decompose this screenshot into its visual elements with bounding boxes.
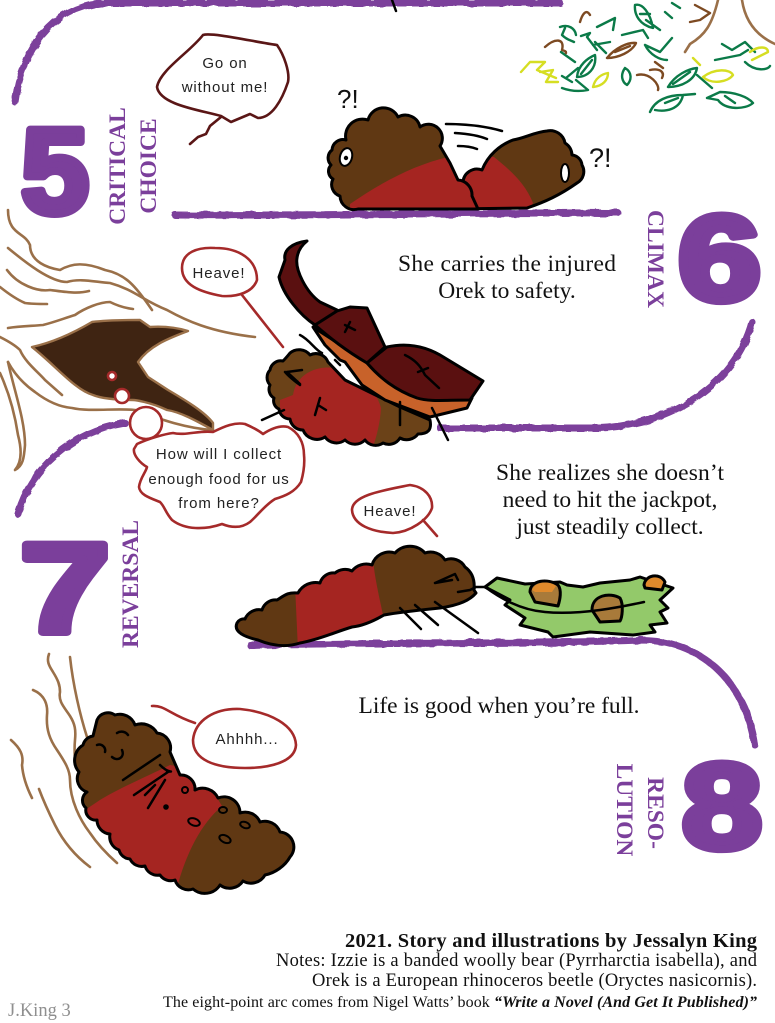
text: she realizes: She realizes she doesn’t	[496, 460, 724, 486]
purple path: ground and curve to resolution	[250, 640, 755, 745]
text: she carries	[398, 251, 616, 304]
label: resolution: LUTION	[611, 764, 637, 856]
number 8: 8	[682, 738, 762, 874]
text: she realizes: need to hit the jackpot,	[503, 487, 717, 513]
Izzie resting	[70, 713, 294, 895]
leaf pile and tree roots	[521, 0, 775, 112]
number 5: 5	[21, 103, 89, 239]
text: she carries: Orek to safety.	[438, 278, 576, 304]
speech bubble: heave (top): Heave!	[193, 265, 245, 282]
label: reversal: REVERSAL	[118, 520, 144, 648]
label: critical choice	[105, 107, 162, 225]
credits block: The eight-point arc comes from Nigel Watts’ book “Write a Novel (And Get It Published)”	[163, 994, 757, 1011]
text: she realizes	[496, 460, 724, 540]
label: critical choice: CRITICAL	[105, 107, 131, 225]
speech bubble: go on without me: Go on	[202, 55, 248, 72]
grass lines beside resting Izzie	[11, 654, 117, 867]
credits block	[163, 930, 758, 1011]
speech bubble: go on without me: without me!	[181, 79, 268, 96]
label: resolution: RESO-	[642, 777, 668, 849]
Izzie carrying Orek	[262, 350, 430, 450]
text: she carries: She carries the injured	[398, 251, 616, 277]
signature: J.King 3	[8, 1001, 71, 1021]
credits block: Notes: Izzie is a banded woolly bear (Pyrrharctia isabella), and	[276, 951, 758, 971]
question marks and motion lines	[337, 0, 612, 173]
speech bubble: ahhhh: Ahhhh...	[215, 731, 279, 748]
thought bubble: how will I collect: enough food for us	[148, 471, 290, 488]
text: life is good: Life is good when you’re full.	[358, 693, 640, 719]
number 6: 6	[678, 190, 761, 326]
question marks and motion lines: ?!	[337, 84, 359, 114]
Orek back half surprised	[462, 129, 586, 210]
speech bubble: ahhhh	[152, 706, 296, 768]
speech bubble: heave (lower): Heave!	[364, 503, 416, 520]
speech bubble: heave (lower)	[352, 485, 437, 536]
question marks and motion lines: ?!	[589, 143, 612, 173]
Izzie dragging leaf	[236, 546, 490, 650]
thought bubble: how will I collect	[134, 423, 304, 528]
purple path: ground under section 5 and 6	[175, 213, 618, 215]
text: she realizes: just steadily collect.	[515, 514, 704, 540]
speech bubble: heave (top)	[182, 248, 283, 347]
cracks in the tree trunk	[0, 210, 255, 470]
tree hollow	[32, 320, 213, 430]
label: climax: CLIMAX	[642, 210, 668, 308]
credits block: 2021. Story and illustrations by Jessalyn King	[345, 930, 758, 952]
purple path: top arc into section 5	[15, 3, 560, 102]
number 7: 7	[20, 517, 110, 659]
label: critical choice: CHOICE	[136, 118, 162, 214]
speech bubble: go on without me	[157, 34, 288, 144]
thought bubble: how will I collect: How will I collect	[156, 446, 282, 463]
leaf with acorns	[485, 576, 673, 637]
Izzie front half surprised	[328, 108, 490, 215]
thought bubbles circles	[108, 372, 162, 439]
Orek rhinoceros beetle	[279, 241, 483, 440]
credits block: Orek is a European rhinoceros beetle (Oryctes nasicornis).	[312, 971, 757, 991]
label: resolution	[611, 764, 668, 856]
purple path: climax curve to reversal	[18, 322, 752, 514]
thought bubble: how will I collect: from here?	[178, 495, 260, 512]
